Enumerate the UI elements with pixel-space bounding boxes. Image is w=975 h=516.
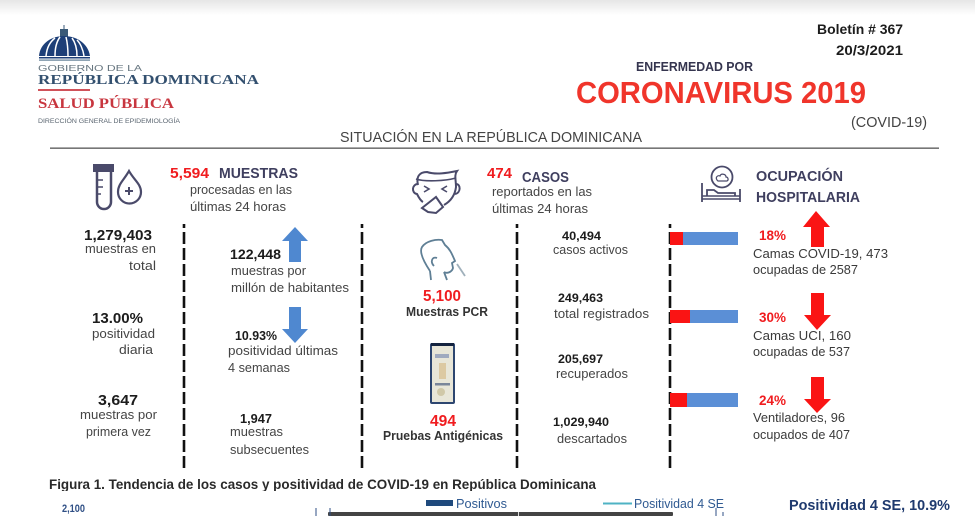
chart axis label: 2,100 bbox=[62, 503, 85, 515]
heading: Situación en la República Dominicana: SITUACIÓN EN LA REPÚBLICA DOMINICANA bbox=[340, 129, 642, 146]
text: Gobierno de la: GOBIERNO DE LA bbox=[38, 63, 142, 73]
stat: 5,100 muestras PCR: 5,100 bbox=[423, 288, 461, 305]
title: Coronavirus 2019: CORONAVIRUS 2019 bbox=[576, 75, 866, 110]
arrow: red down bbox=[804, 293, 831, 330]
stat: 474 casos: 474 bbox=[487, 165, 513, 182]
stat: positividad diaria bbox=[92, 310, 155, 357]
stat: muestras en total: 1,279,403 bbox=[84, 227, 152, 244]
stat: 5,594 muestras: 5,594 bbox=[170, 166, 209, 182]
stat: positividad 4 semanas bbox=[228, 329, 339, 375]
stat: 494 pruebas antigénicas bbox=[383, 413, 503, 443]
logo: Gobierno de la República Dominicana, Salud Pública bbox=[38, 25, 259, 125]
panel: muestras bbox=[80, 164, 349, 457]
stat: camas UCI: Camas UCI, 160 bbox=[753, 329, 851, 343]
stat: muestras en total: muestras en bbox=[85, 241, 156, 256]
stat: camas UCI: 30% bbox=[759, 309, 787, 325]
panel: casos bbox=[383, 165, 650, 446]
text: procesadas: procesadas en las bbox=[190, 182, 292, 197]
stat: muestras en total bbox=[84, 227, 156, 273]
stat: muestras por millón: millón de habitantes bbox=[231, 280, 349, 295]
stat: casos activos bbox=[553, 229, 628, 257]
stat: ventiladores bbox=[753, 392, 850, 442]
stat: camas COVID-19: 18% bbox=[759, 227, 787, 243]
stat: muestras subsecuentes: muestras bbox=[230, 424, 283, 439]
heading: Ocupación hospitalaria: HOSPITALARIA bbox=[756, 190, 860, 206]
stat: muestras por primera vez bbox=[80, 392, 158, 439]
text: reportados: reportados en las bbox=[492, 184, 592, 199]
stat: positividad 4 semanas: 10.93% bbox=[235, 329, 277, 343]
stat: casos activos: casos activos bbox=[553, 242, 628, 257]
arrow: down bbox=[282, 307, 308, 343]
icon: dome bbox=[39, 25, 90, 61]
text: República Dominicana: REPÚBLICA DOMINICANA bbox=[38, 72, 259, 87]
stat: camas UCI bbox=[753, 309, 851, 359]
panel: muestras: MUESTRAS bbox=[219, 166, 298, 182]
stat: casos activos: 40,494 bbox=[562, 229, 601, 243]
stat: muestras por millón: muestras por bbox=[231, 263, 307, 278]
stat: 494 pruebas antigénicas: 494 bbox=[430, 413, 456, 430]
stat: ventiladores: 24% bbox=[759, 392, 787, 408]
stat: muestras subsecuentes: 1,947 bbox=[240, 411, 272, 426]
stat: 494 pruebas antigénicas: Pruebas Antigénicas bbox=[383, 429, 503, 443]
stat: ventiladores: ocupados de 407 bbox=[753, 428, 850, 442]
text: Salud Pública: SALUD PÚBLICA bbox=[38, 95, 174, 112]
stat: 5,100 muestras PCR bbox=[406, 288, 488, 319]
text: Dirección General de Epidemiología: DIRECCIÓN GENERAL DE EPIDEMIOLOGÍA bbox=[38, 116, 181, 125]
stat: positividad 4 semanas: 4 semanas bbox=[228, 360, 290, 375]
heading: Ocupación hospitalaria bbox=[756, 167, 860, 206]
figure title: Figura 1. Tendencia de los casos y positividad de COVID-19 en República Dominicana bbox=[49, 476, 596, 492]
bulletin number: Boletín # 367 bbox=[817, 22, 903, 37]
chart legend: positivos: Positivos bbox=[456, 496, 507, 511]
stat: descartados: descartados bbox=[557, 431, 627, 446]
icon: hospital bed bbox=[702, 166, 740, 202]
stat: muestras subsecuentes: subsecuentes bbox=[230, 442, 309, 457]
arrow: red up bbox=[803, 211, 830, 247]
stat: total registrados: 249,463 bbox=[558, 291, 603, 305]
stat: muestras subsecuentes bbox=[230, 411, 309, 457]
stat: camas COVID-19: ocupadas de 2587 bbox=[753, 263, 858, 277]
panel: casos: CASOS bbox=[522, 170, 569, 186]
callout: positividad 4 SE 10.9%: Positividad 4 SE, 10.9% bbox=[789, 497, 950, 514]
stat: recuperados: recuperados bbox=[556, 366, 628, 381]
icon: nasal swab bbox=[421, 240, 465, 280]
stat: descartados bbox=[553, 415, 627, 446]
subtitle: COVID-19: (COVID-19) bbox=[851, 115, 927, 131]
icon: antigen test bbox=[430, 343, 455, 404]
bar: camas UCI 30% bbox=[670, 310, 738, 323]
chart: top edge of trend chart bbox=[316, 508, 723, 516]
stat: recuperados: 205,697 bbox=[558, 352, 603, 366]
arrow: red down bbox=[804, 377, 831, 413]
stat: muestras por primera vez: primera vez bbox=[86, 424, 151, 439]
stat: muestras en total: total bbox=[129, 258, 156, 273]
arrow: up bbox=[282, 227, 308, 262]
icon: face with mask bbox=[413, 171, 460, 213]
stat: total registrados: total registrados bbox=[554, 306, 650, 321]
stat: 5,100 muestras PCR: Muestras PCR bbox=[406, 305, 488, 319]
stat: muestras por primera vez: muestras por bbox=[80, 407, 158, 422]
stat: ventiladores: Ventiladores, 96 bbox=[753, 411, 845, 425]
heading: Ocupación hospitalaria: OCUPACIÓN bbox=[756, 167, 843, 185]
stat: muestras por millón bbox=[230, 246, 349, 295]
stat: positividad diaria: 13.00% bbox=[92, 310, 143, 327]
chart legend: positividad 4 SE: Positividad 4 SE bbox=[634, 496, 724, 511]
icon: test tube and blood drop bbox=[93, 164, 141, 209]
chart legend: positivos bbox=[426, 496, 507, 511]
stat: positividad 4 semanas: positividad últimas bbox=[228, 343, 339, 358]
dashed dividers bbox=[184, 224, 670, 472]
stat: muestras por primera vez: 3,647 bbox=[98, 392, 138, 409]
subtitle: Enfermedad por: ENFERMEDAD POR bbox=[636, 60, 753, 74]
stat: muestras por millón: 122,448 bbox=[230, 246, 281, 262]
bar: camas COVID-19 18% bbox=[670, 232, 738, 245]
panel: ocupación hospitalaria bbox=[670, 166, 888, 442]
stat: descartados: 1,029,940 bbox=[553, 415, 609, 429]
panel: muestras: últimas 24 horas bbox=[190, 199, 286, 214]
stat: positividad diaria: positividad bbox=[92, 326, 155, 341]
stat: camas COVID-19: Camas COVID-19, 473 bbox=[753, 247, 888, 261]
stat: positividad diaria: diaria bbox=[119, 342, 154, 357]
panel: casos: últimas 24 horas bbox=[492, 201, 588, 216]
bar: ventiladores 24% bbox=[670, 393, 738, 407]
stat: recuperados bbox=[556, 352, 628, 381]
stat: camas COVID-19 bbox=[753, 227, 888, 277]
stat: total registrados bbox=[554, 291, 650, 321]
bulletin date: 20/3/2021 bbox=[836, 42, 903, 58]
stat: camas UCI: ocupadas de 537 bbox=[753, 345, 850, 359]
